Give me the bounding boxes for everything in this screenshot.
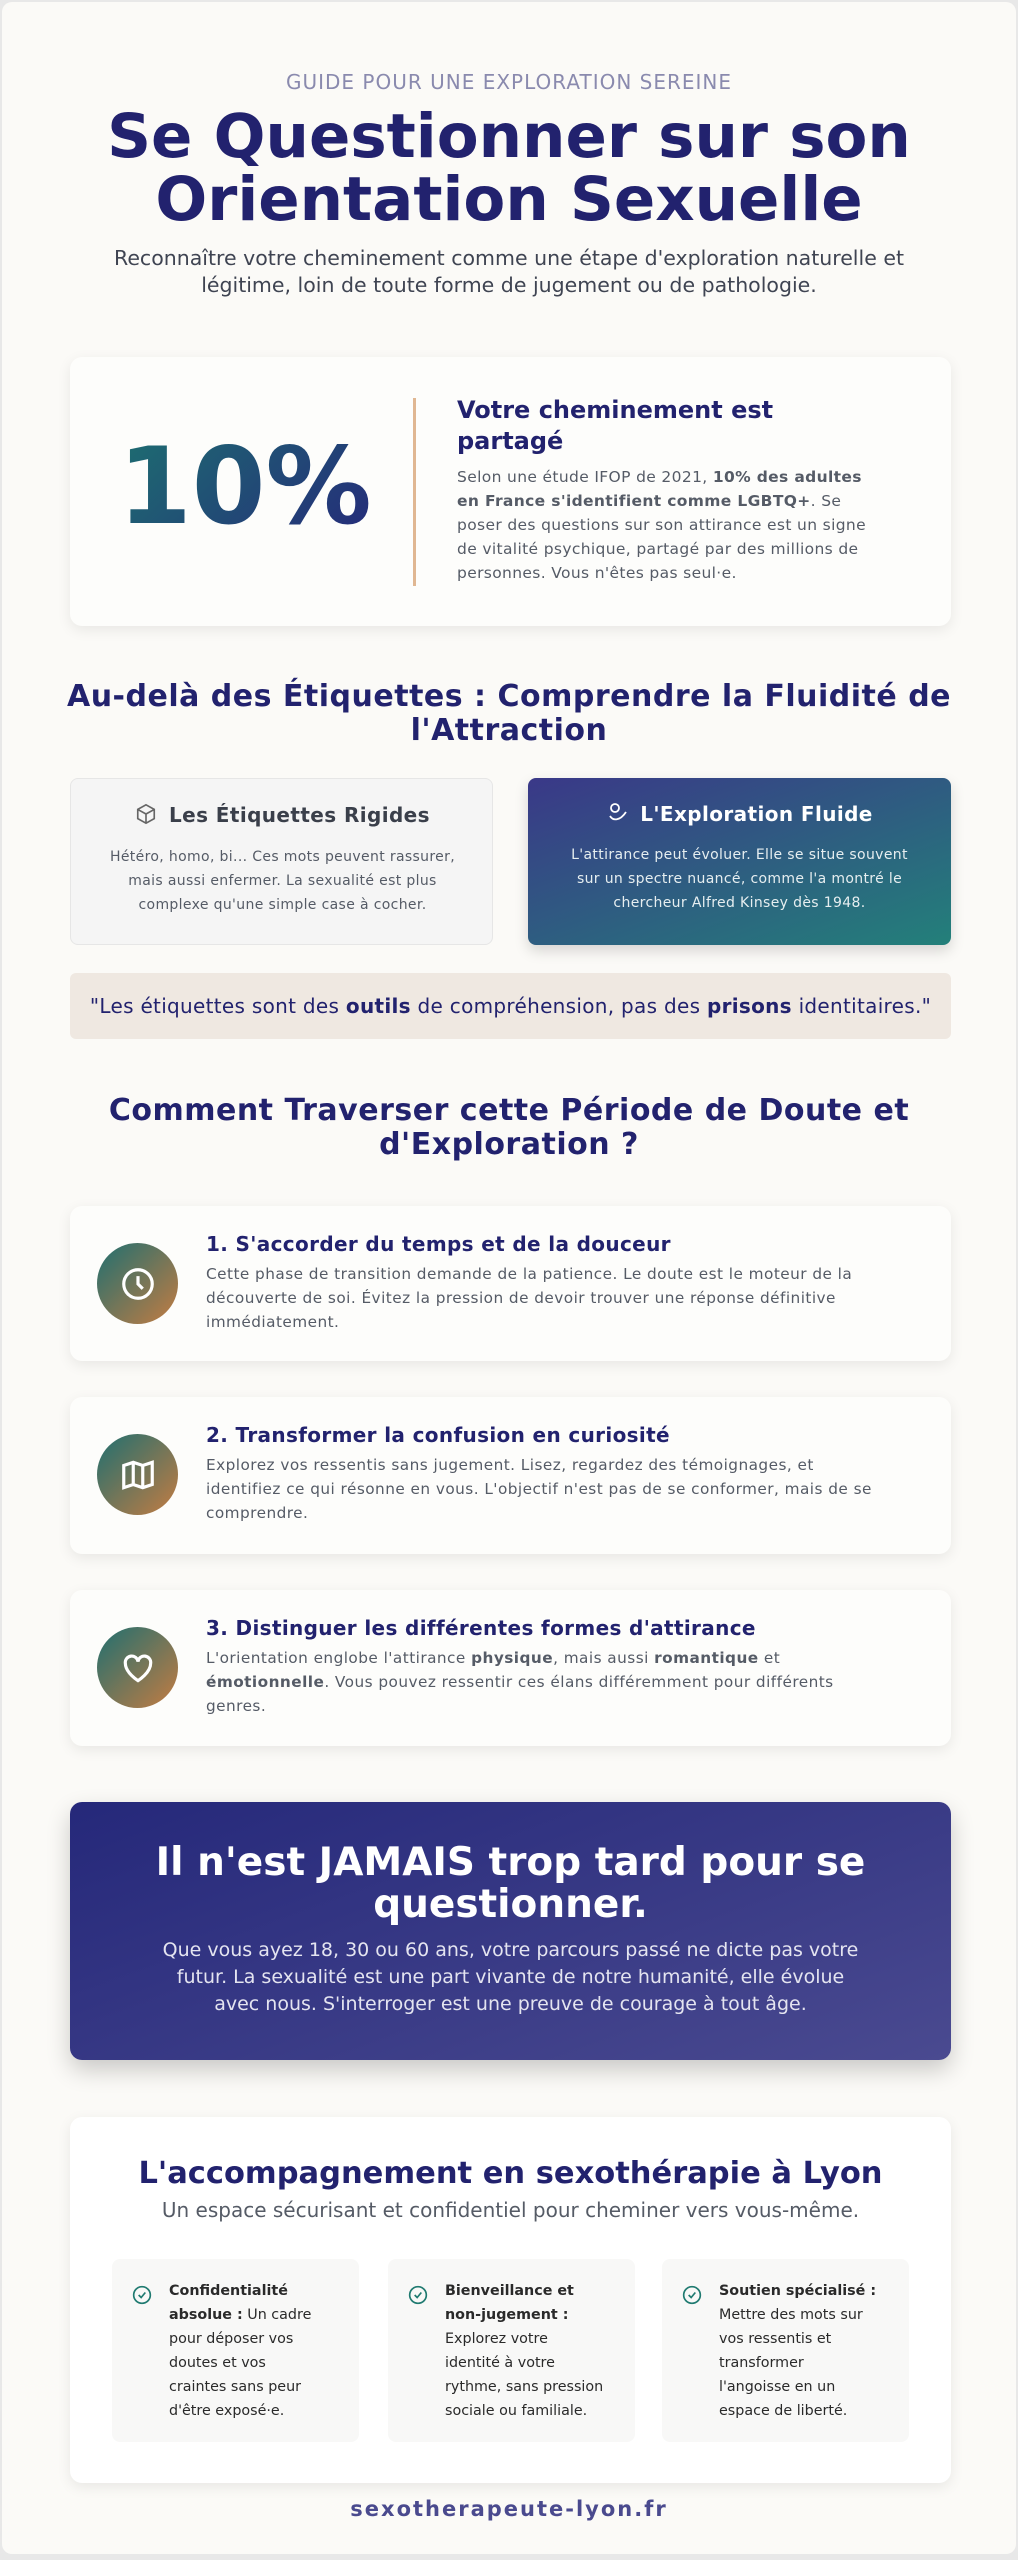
feature: bienveillance: [388, 2259, 635, 2442]
step 3: 3. Distinguer les différentes formes d'attirance: [206, 1616, 756, 1640]
stat heading: Votre cheminement est partagé: [457, 396, 773, 455]
feature: bienveillance: rythme, sans pression: [445, 2379, 603, 2395]
quote: [70, 973, 951, 1039]
feature: bienveillance: Bienveillance et: [445, 2283, 574, 2299]
panel: accompagnement Lyon: L'accompagnement en sexothérapie à Lyon: [138, 2156, 883, 2191]
panel: étiquettes rigides: [70, 778, 493, 945]
feature: soutien: Mettre des mots sur: [719, 2307, 863, 2323]
step 3: L'orientation englobe l'attirance physique, mais aussi romantique et émotionnelle. Vous pouvez ressentir ces élans différemment pour différents genres.: [206, 1649, 834, 1715]
feature: bienveillance: non-jugement :: [445, 2307, 568, 2323]
heading: fluidité: Au-delà des Étiquettes : Comprendre la Fluidité de l'Attraction: [67, 679, 951, 748]
feature: soutien: l'angoisse en un: [719, 2379, 835, 2395]
panel: exploration fluide: L'Exploration Fluide: [640, 802, 873, 826]
feature: soutien: transformer: [719, 2355, 804, 2371]
title: Orientation Sexuelle: [155, 164, 863, 235]
big stat: 10%: [118, 425, 372, 548]
step 2: Explorez vos ressentis sans jugement. Lisez, regardez des témoignages, et identifiez ce qui résonne en vous. L'objectif n'est pas de se conformer, mais de se comprendre.: [206, 1456, 872, 1522]
feature: bienveillance: sociale ou familiale.: [445, 2403, 587, 2419]
step 1: Cette phase de transition demande de la patience. Le doute est le moteur de la découverte de soi. Évitez la pression de devoir trouver une réponse définitive immédiatement.: [206, 1265, 852, 1331]
icon: map: [97, 1434, 178, 1515]
intro text: Reconnaître votre cheminement comme une étape d'exploration naturelle et légitime, loin de toute forme de jugement ou de pathologie.: [114, 246, 904, 297]
feature: confidentialité: doutes et vos: [169, 2355, 266, 2371]
step 2: [70, 1397, 951, 1554]
stat text: Selon une étude IFOP de 2021, 10% des adultes en France s'identifient comme LGBTQ+. Se poser des questions sur son attirance est un signe de vitalité psychique, partagé par des millions de personnes. Vous n'êtes pas seul·e.: [457, 468, 866, 582]
feature: confidentialité: d'être exposé·e.: [169, 2403, 284, 2419]
feature: confidentialité: craintes sans peur: [169, 2379, 301, 2395]
step 1: 1. S'accorder du temps et de la douceur: [206, 1232, 671, 1256]
feature: confidentialité: [112, 2259, 359, 2442]
callout: jamais trop tard: [70, 1802, 951, 2060]
feature: soutien: vos ressentis et: [719, 2331, 831, 2347]
icon: heart: [97, 1627, 178, 1708]
step 1: [70, 1206, 951, 1361]
footer url: sexotherapeute-lyon.fr: [350, 2497, 668, 2521]
callout: jamais trop tard: Que vous ayez 18, 30 ou 60 ans, votre parcours passé ne dicte pas votre: [163, 1939, 858, 1961]
feature: confidentialité: pour déposer vos: [169, 2331, 293, 2347]
feature: confidentialité: absolue : Un cadre: [169, 2307, 311, 2323]
quote: "Les étiquettes sont des outils de compréhension, pas des prisons identitaires.": [90, 994, 931, 1018]
feature: soutien: espace de liberté.: [719, 2403, 847, 2419]
panel: étiquettes rigides: Hétéro, homo, bi... Ces mots peuvent rassurer, mais aussi enfermer. La sexualité est plus complexe qu'une simple case à cocher.: [110, 849, 455, 913]
step 3: [70, 1590, 951, 1746]
kicker: GUIDE POUR UNE EXPLORATION SEREINE: [286, 70, 732, 94]
feature: bienveillance: identité à votre: [445, 2355, 555, 2371]
callout: jamais trop tard: avec nous. S'interroger est une preuve de courage à tout âge.: [214, 1993, 807, 2015]
title with cube icon: Les Étiquettes Rigides: [169, 803, 430, 827]
feature: bienveillance: Explorez votre: [445, 2331, 548, 2347]
panel: stat card: [70, 357, 951, 626]
panel: accompagnement Lyon: Un espace sécurisant et confidentiel pour cheminer vers vous-même.: [162, 2198, 859, 2222]
panel: accompagnement Lyon: [70, 2117, 951, 2483]
step 2: 2. Transformer la confusion en curiosité: [206, 1423, 670, 1447]
feature: soutien: [662, 2259, 909, 2442]
heading: comment traverser: Comment Traverser cette Période de Doute et d'Exploration ?: [109, 1093, 909, 1162]
panel: exploration fluide: L'attirance peut évoluer. Elle se situe souvent sur un spectre nuancé, comme l'a montré le chercheur Alfred Kinsey dès 1948.: [571, 847, 908, 911]
icon: clock: [97, 1243, 178, 1324]
callout: jamais trop tard: Il n'est JAMAIS trop tard pour se questionner.: [156, 1840, 865, 1927]
title: Se Questionner sur son: [107, 101, 911, 172]
feature: soutien: Soutien spécialisé :: [719, 2283, 876, 2299]
panel: exploration fluide: [528, 778, 951, 945]
callout: jamais trop tard: futur. La sexualité est une part vivante de notre humanité, elle évolue: [177, 1966, 844, 1988]
title: [107, 101, 911, 235]
feature: confidentialité: Confidentialité: [169, 2283, 288, 2299]
